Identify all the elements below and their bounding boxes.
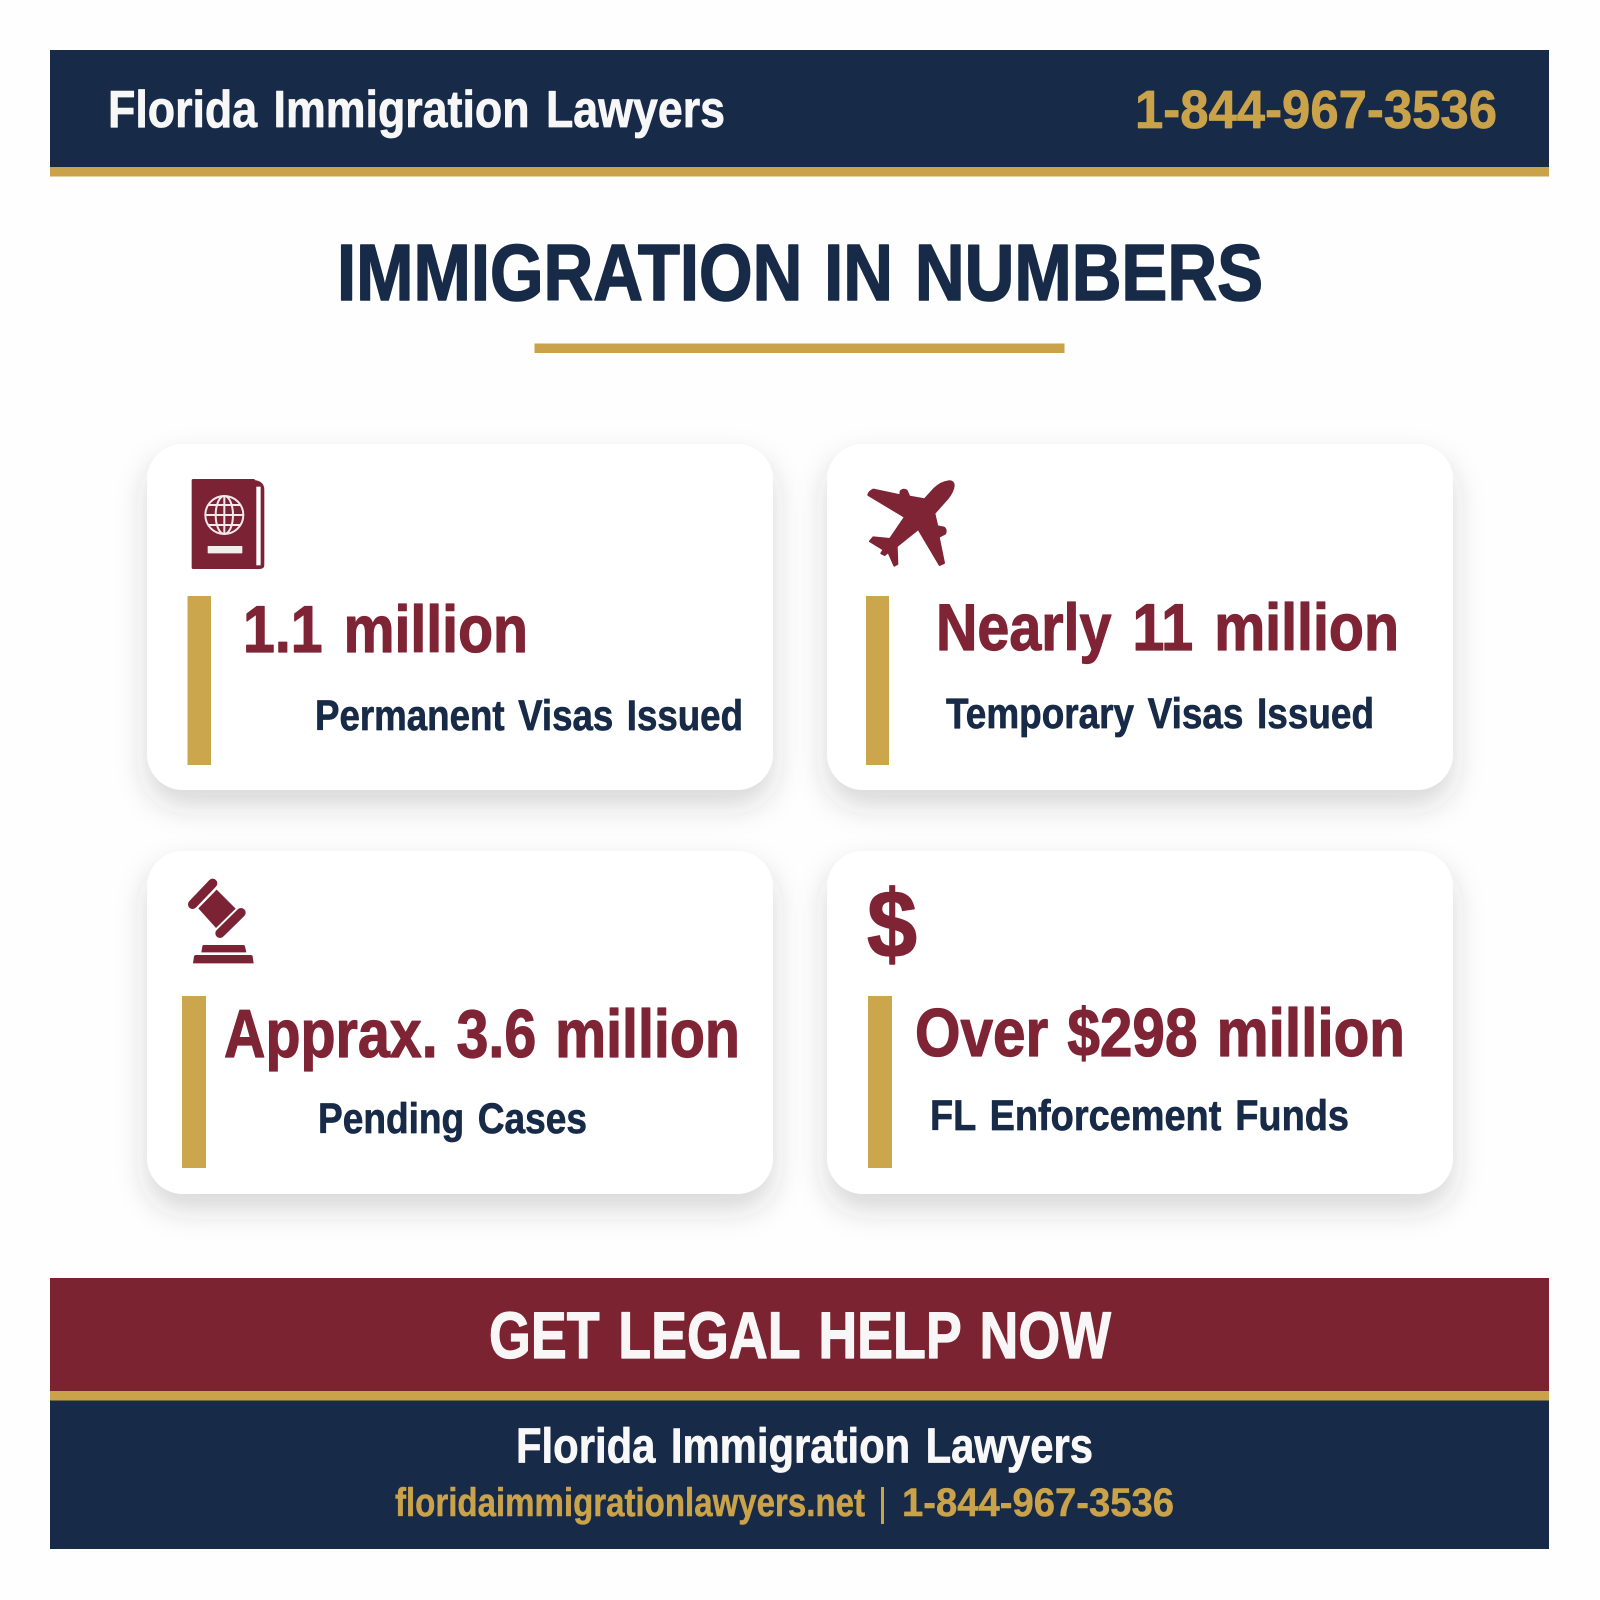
title underline [534,344,1064,353]
icon: passport [192,479,264,569]
title: IMMIGRATION IN NUMBERS [337,228,1263,317]
stat label: Permanent Visas Issued [315,692,743,740]
stat label: Pending Cases [318,1095,587,1143]
footer phone number: 1-844-967-3536 [902,1481,1174,1525]
gold accent bar [868,996,892,1168]
footer website: floridaimmigrationlawyers.net [395,1481,865,1525]
stat value: 1.1 million [243,592,528,666]
panel: enforcement funds [827,851,1453,1194]
stat label: FL Enforcement Funds [930,1092,1349,1140]
call to action text: GET LEGAL HELP NOW [489,1298,1112,1372]
icon: gavel [193,883,254,963]
header firm name: Florida Immigration Lawyers [108,81,725,139]
panel: pending cases [147,851,773,1194]
stat value: Nearly 11 million [936,590,1399,664]
stat value: Apprax. 3.6 million [224,996,740,1072]
header phone number: 1-844-967-3536 [1135,80,1497,140]
footer contact panel [50,1400,1549,1549]
gold accent bar [188,596,211,765]
stat value: Over $298 million [915,995,1405,1071]
panel: temporary visas [827,444,1453,790]
panel: permanent visas [147,444,773,790]
stat label: Temporary Visas Issued [946,690,1374,738]
gold accent bar [866,596,889,765]
call to action banner [50,1278,1549,1391]
footer firm name: Florida Immigration Lawyers [516,1420,1093,1474]
icon: airplane [868,481,954,566]
gold accent bar [182,996,206,1168]
icon: dollar sign: $ [867,871,917,978]
footer separator [881,1487,884,1524]
gold divider [50,1391,1549,1400]
header bar [50,50,1549,176]
